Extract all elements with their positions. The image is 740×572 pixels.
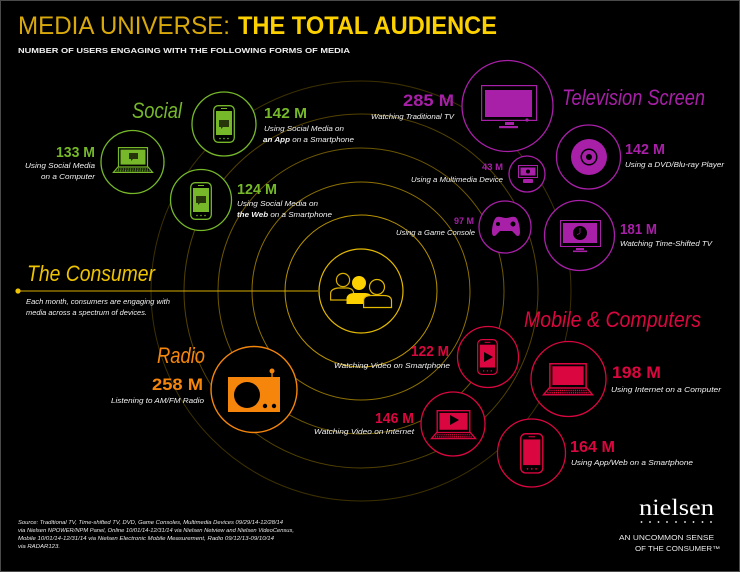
consumer description: Each month, consumers are engaging with [26, 297, 170, 306]
item: am/fm radio: 258 M [152, 375, 203, 394]
panel: television screen [371, 60, 725, 270]
item: social app on smartphone [192, 92, 354, 156]
item: video on internet: 146 M [375, 410, 414, 427]
item: social on computer: on a Computer [41, 172, 96, 181]
heading: mobile and computers: Mobile & Computers [524, 307, 701, 332]
nielsen logo [619, 495, 720, 553]
item: traditional tv: Watching Traditional TV [371, 112, 455, 121]
item: social web on smartphone: Using Social Media on [237, 199, 318, 208]
item: time-shifted tv [544, 200, 713, 270]
icon: consumers group [319, 249, 403, 333]
consumer description [26, 297, 170, 317]
item: social on computer: Using Social Media [25, 161, 95, 170]
item: social web on smartphone: 124 M [237, 181, 277, 198]
item: video on internet [314, 392, 485, 456]
consumer description: media across a spectrum of devices. [26, 308, 147, 317]
item: internet on computer: 198 M [612, 363, 661, 382]
item: traditional tv: 285 M [403, 91, 454, 110]
heading: the consumer: The Consumer [27, 261, 156, 286]
item: game console [396, 201, 531, 253]
item: app or web on smartphone: Using App/Web on a Smartphone [571, 458, 693, 467]
item: social on computer: 133 M [56, 144, 95, 161]
item: social app on smartphone: 142 M [264, 105, 307, 122]
item: video on internet: Watching Video on Internet [314, 427, 415, 436]
item: am/fm radio [111, 346, 297, 432]
nielsen logo: AN UNCOMMON SENSE [619, 535, 714, 542]
item: time-shifted tv: 181 M [620, 221, 657, 238]
consumer connector line [15, 288, 318, 294]
panel: social [25, 92, 354, 230]
nielsen logo: nielsen [639, 495, 715, 520]
source note: via RADAR123. [18, 544, 60, 550]
item: video on smartphone: Watching Video on Smartphone [334, 361, 450, 370]
source note: Source: Traditional TV, Time-shifted TV, DVD, Game Consoles, Multimedia Devices 09/29/14-12/28/14 [18, 520, 283, 526]
item: internet on computer [531, 342, 722, 416]
item: dvd player: Using a DVD/Blu-ray Player [625, 160, 725, 169]
source note: via Nielsen NPOWER/NPM Panel, Online 10/01/14-12/31/14 via Nielsen Netview and Nielsen VideoCensus, [18, 528, 294, 534]
item: am/fm radio: Listening to AM/FM Radio [111, 396, 204, 405]
panel: radio [111, 343, 297, 432]
item: game console: Using a Game Console [396, 228, 475, 237]
title: MEDIA UNIVERSE: [18, 12, 230, 40]
panel: mobile and computers [314, 307, 722, 487]
nielsen logo: OF THE CONSUMER™ [635, 546, 720, 553]
source note [18, 520, 294, 550]
item: multimedia device: 43 M [482, 162, 503, 172]
source note: Mobile 10/01/14-12/31/14 via Nielsen Electronic Mobile Measurement, Radio 09/12/13-09/10/14 [18, 536, 274, 542]
heading: social: Social [132, 98, 183, 123]
item: social web on smartphone: the Web on a Smartphone [237, 210, 332, 219]
item: internet on computer: Using Internet on a Computer [611, 385, 722, 394]
item: app or web on smartphone: 164 M [570, 439, 615, 456]
item: game console: 97 M [454, 216, 474, 226]
item: multimedia device [411, 156, 545, 192]
item: social web on smartphone [170, 170, 332, 230]
item: traditional tv [371, 60, 553, 152]
item: multimedia device: Using a Multimedia Device [411, 175, 503, 184]
item: dvd player [556, 125, 725, 189]
item: video on smartphone [334, 326, 518, 388]
item: video on smartphone: 122 M [411, 343, 449, 360]
title [18, 12, 497, 40]
concentric audience rings [151, 81, 571, 501]
item: social app on smartphone: Using Social Media on [264, 124, 344, 133]
panel: the consumer [15, 249, 403, 333]
item: social on computer [25, 130, 164, 194]
item: app or web on smartphone [498, 419, 693, 487]
item: dvd player: 142 M [625, 141, 665, 158]
item: social app on smartphone: an App on a Smartphone [263, 135, 354, 144]
heading: radio: Radio [157, 343, 205, 368]
subtitle: NUMBER OF USERS ENGAGING WITH THE FOLLOWING FORMS OF MEDIA [18, 46, 351, 55]
item: time-shifted tv: Watching Time-Shifted TV [620, 239, 713, 248]
title: THE TOTAL AUDIENCE [238, 12, 497, 40]
heading: television screen: Television Screen [562, 85, 705, 110]
